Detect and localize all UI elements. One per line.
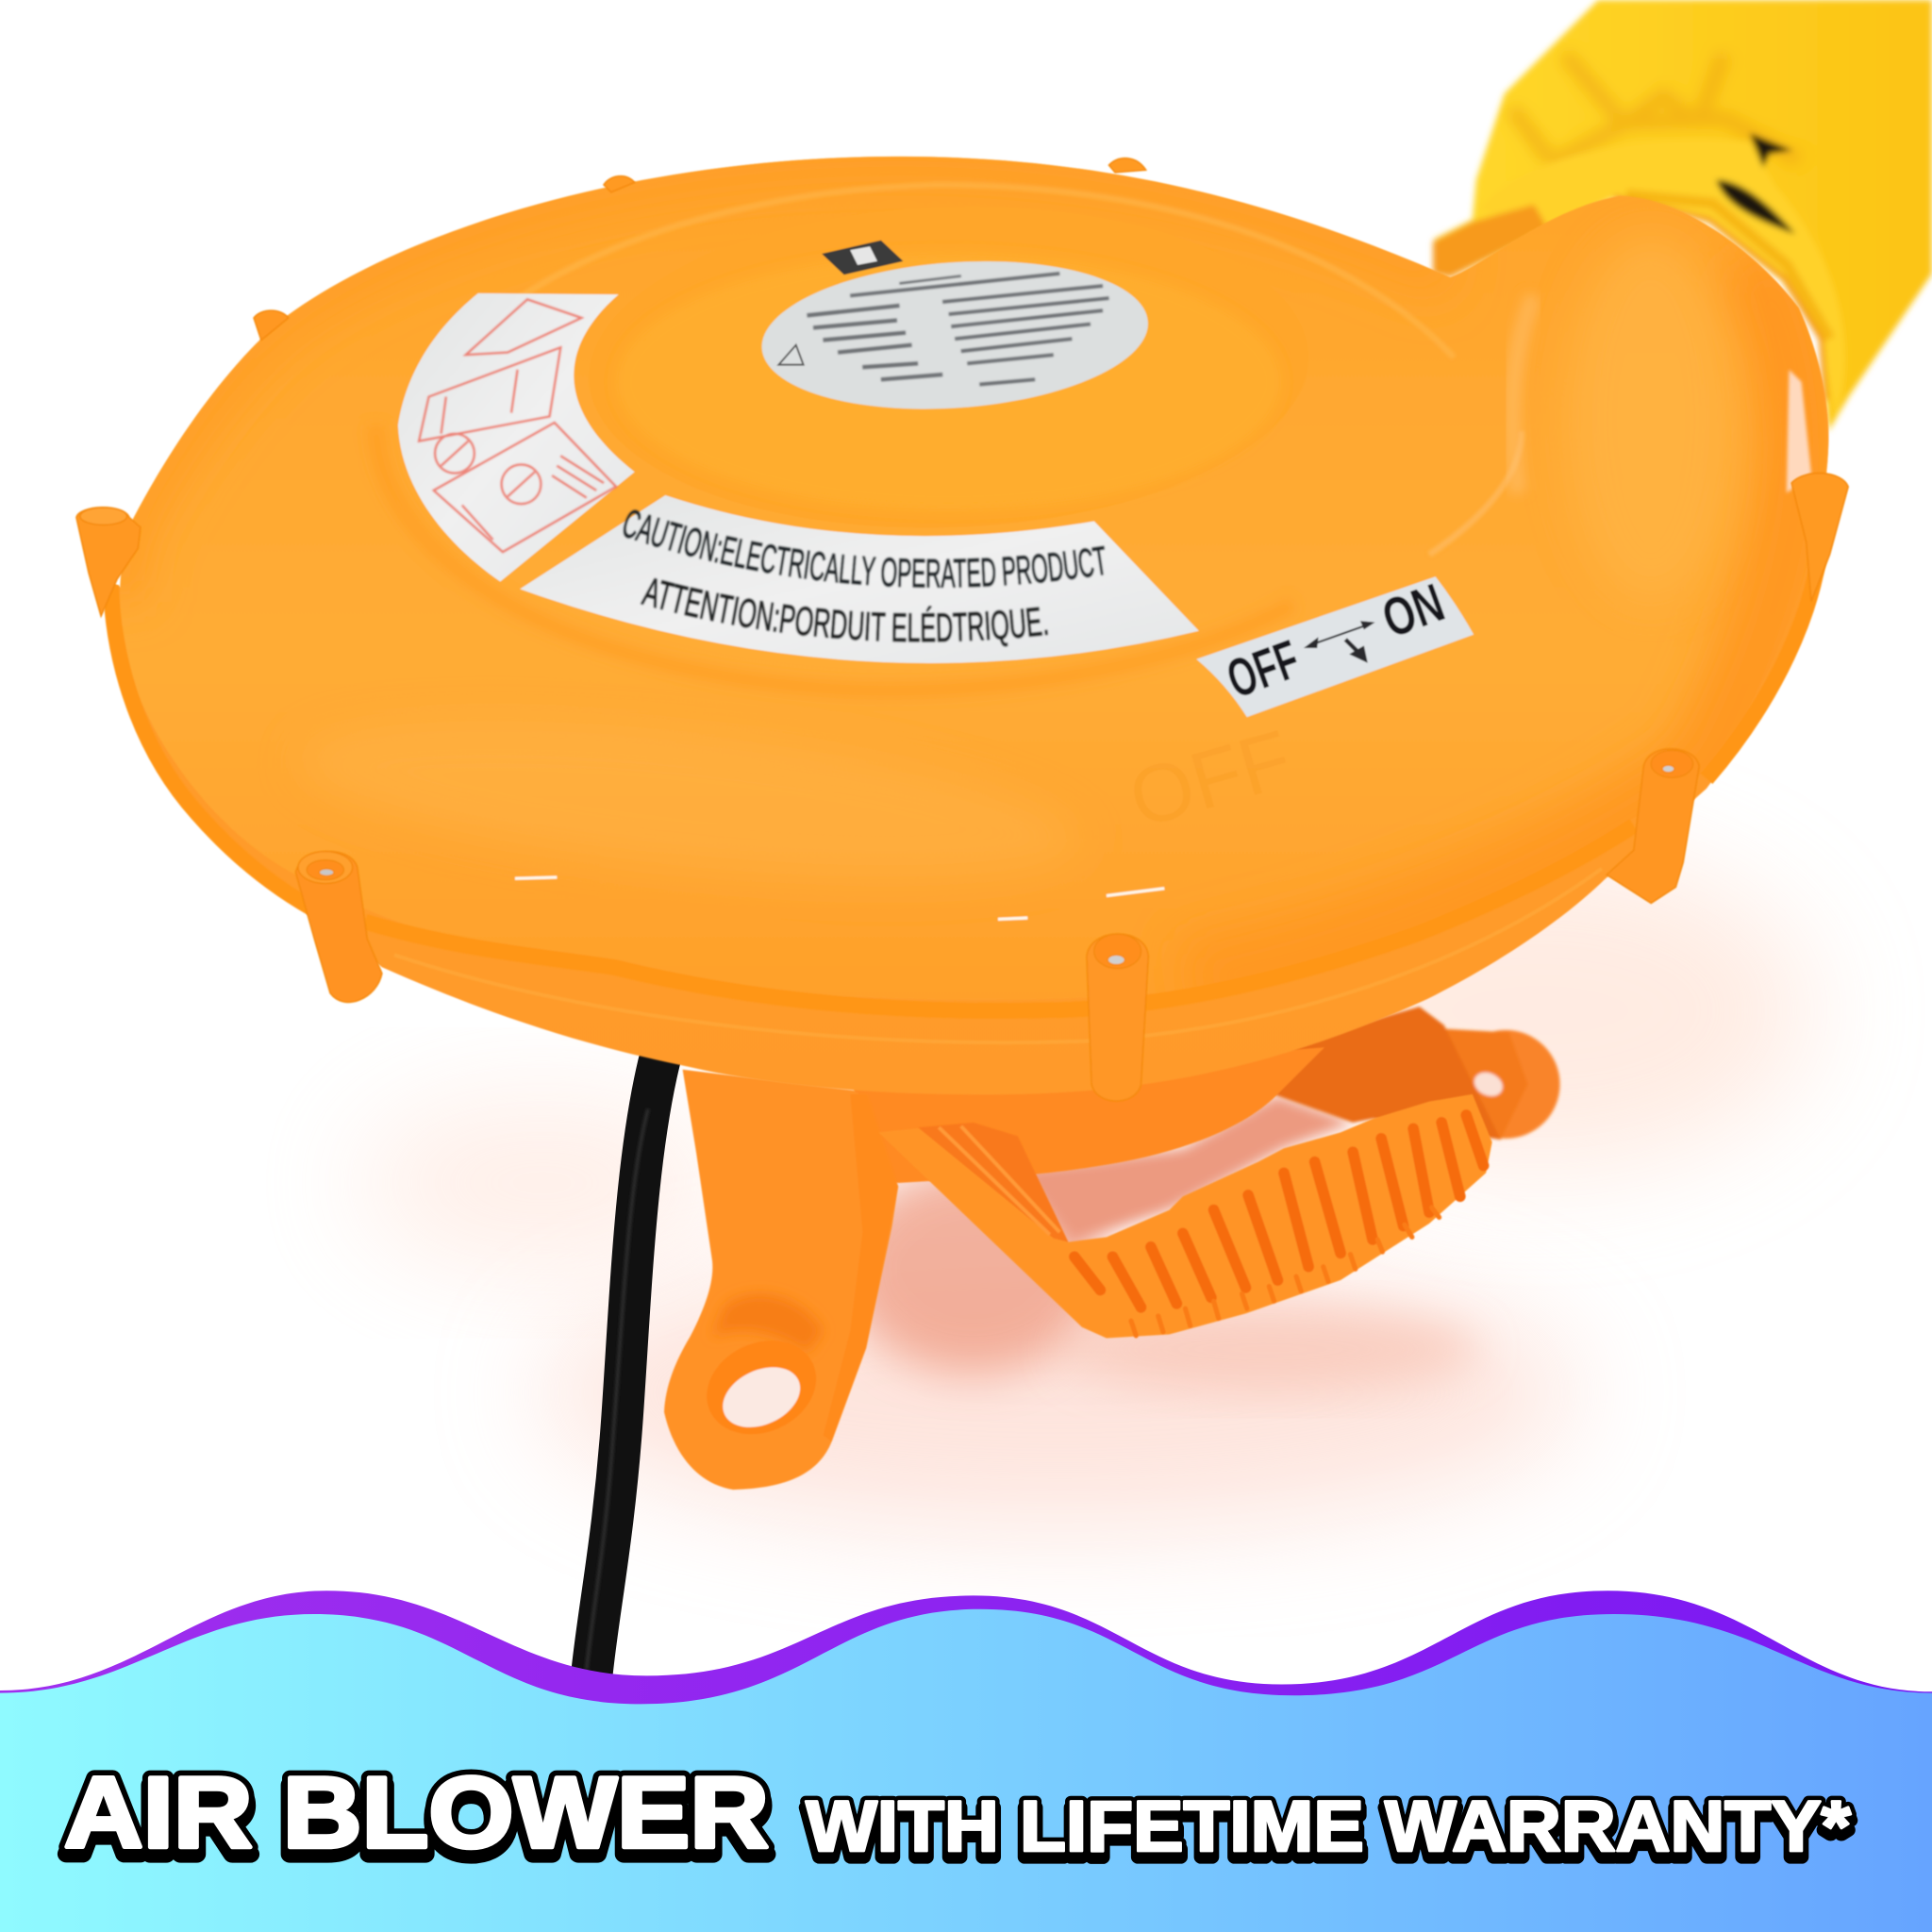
headline: AIR BLOWER xyxy=(64,1763,769,1876)
rear stand and foot xyxy=(1232,1007,1560,1140)
cuff xyxy=(1478,139,1844,419)
OFF text: OFF xyxy=(1220,629,1307,710)
gloss xyxy=(317,740,1058,877)
lower housing xyxy=(108,492,1824,1094)
tabs: rear top xyxy=(604,158,1146,192)
rim xyxy=(111,542,1821,1010)
centre info label xyxy=(757,249,1153,421)
rim highlights xyxy=(515,877,1164,919)
handle teeth xyxy=(1131,1208,1440,1336)
yellow inflatable tube xyxy=(1433,0,1932,431)
on/off switch sticker xyxy=(1196,573,1474,717)
duct highlight xyxy=(1513,295,1534,492)
dome under body xyxy=(854,1047,1324,1183)
headline: AIR BLOWER xyxy=(64,1756,769,1869)
power cord xyxy=(587,1047,663,1678)
main blower housing xyxy=(104,155,1830,1044)
handle ribs xyxy=(1074,1115,1484,1307)
bottom banner xyxy=(0,1591,1932,1932)
small black badge xyxy=(822,241,903,275)
gradient band xyxy=(0,1609,1932,1932)
purple wave xyxy=(0,1591,1932,1725)
edge shading xyxy=(120,157,1450,601)
rim lower groove xyxy=(394,869,1602,1042)
subheading: WITH LIFETIME WARRANTY* xyxy=(806,1787,1851,1867)
raised centre disc xyxy=(584,194,1314,540)
caution text: CAUTION:ELECTRICALLY OPERATED PRODUCT xyxy=(622,508,1106,589)
headline: AIR BLOWER xyxy=(64,1756,769,1869)
tab: upper left xyxy=(76,508,141,616)
left stand with foot xyxy=(664,1070,898,1490)
subheading: WITH LIFETIME WARRANTY* xyxy=(806,1792,1851,1873)
floor shadow xyxy=(358,850,1811,1528)
sliver behind outlet xyxy=(1787,370,1811,492)
strap clips xyxy=(1716,133,1795,234)
mounting hole xyxy=(691,1324,832,1452)
subheading: WITH LIFETIME WARRANTY* xyxy=(806,1787,1851,1867)
tab: right front xyxy=(1607,749,1699,903)
tab: right outlet xyxy=(1791,474,1848,601)
spiral groove xyxy=(407,185,1454,419)
recess around stickers xyxy=(375,425,1293,691)
tab: centre front xyxy=(1087,934,1148,1101)
ON text: ON xyxy=(1374,573,1452,650)
attention text: ATTENTION:PORDUIT ELÉDTRIQUE. xyxy=(640,577,1049,648)
tab: top left xyxy=(254,310,289,340)
warning sticker with red diagrams xyxy=(398,293,635,581)
bag folds xyxy=(1512,54,1799,162)
screw tabs xyxy=(76,158,1848,1101)
switch arrows xyxy=(1304,621,1375,663)
tab: lower left xyxy=(295,851,382,1002)
embossed OFF mark: OFF xyxy=(1120,713,1301,845)
carry handle xyxy=(878,1094,1492,1338)
caution sticker xyxy=(519,494,1200,664)
